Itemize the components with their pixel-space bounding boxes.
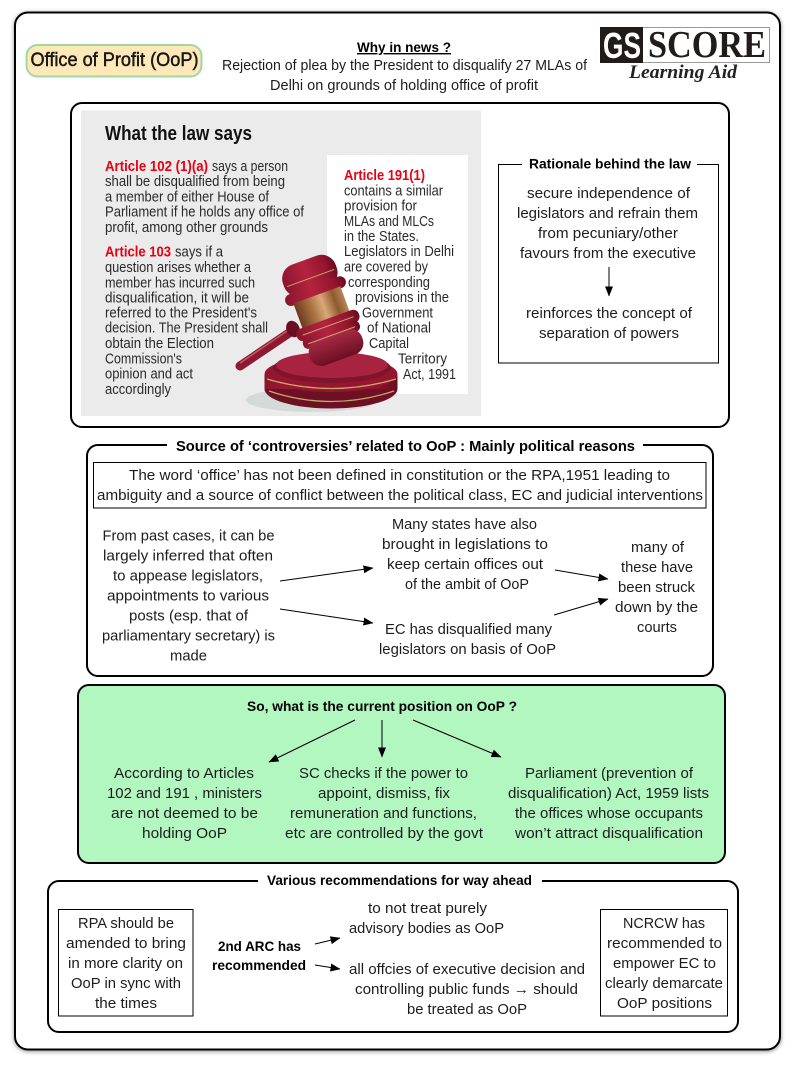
RPA box: the times <box>95 995 157 1012</box>
struck down text: down by the <box>615 599 698 616</box>
NCRCW box: clearly demarcate <box>605 975 723 992</box>
2nd ARC label: recommended <box>212 957 306 973</box>
struck down text: these have <box>621 559 693 576</box>
definition box: The word ‘office’ has not been defined in constitution or the RPA,1951 leading to <box>129 467 670 484</box>
past cases text: appointments to various <box>107 588 269 604</box>
NCRCW box: NCRCW has <box>623 915 705 932</box>
logo: GS Score Learning Aid <box>600 24 770 83</box>
panel: recommendations <box>48 873 738 1032</box>
parliament act text: won’t attract disqualification <box>514 825 703 842</box>
graphic heading: What the law says <box>105 122 252 145</box>
SC checks text <box>285 765 484 842</box>
SC checks text: etc are controlled by the govt <box>285 825 484 842</box>
current position heading: So, what is the current position on OoP ? <box>247 698 517 714</box>
past cases text: posts (esp. that of <box>129 608 249 624</box>
conclusion text: separation of powers <box>539 325 679 342</box>
past cases text: to appease legislators, <box>113 568 263 584</box>
advisory bodies text <box>349 900 504 937</box>
article 102 text: Parliament if he holds any office of <box>105 205 305 221</box>
article 191 text: Government <box>362 306 433 322</box>
recommendations heading: Various recommendations for way ahead <box>267 873 532 888</box>
NCRCW box: OoP positions <box>617 995 712 1012</box>
article 103 text: member has incurred such <box>105 275 255 291</box>
advisory bodies text: to not treat purely <box>368 900 488 917</box>
arrow <box>555 570 608 579</box>
articles text <box>107 765 262 842</box>
why in news heading: Why in news ? <box>357 39 451 55</box>
NCRCW box <box>600 910 728 1016</box>
rationale text: from pecuniary/other <box>538 225 678 242</box>
article 103 text: obtain the Election <box>105 336 214 352</box>
article 191 text: are covered by <box>344 260 429 276</box>
article 102 text: Article 102 (1)(a) <box>105 158 208 175</box>
article 103 text <box>105 244 268 398</box>
EC disqualified text <box>379 621 556 658</box>
EC disqualified text: EC has disqualified many <box>385 621 552 638</box>
RPA box: in more clarity on <box>68 955 183 972</box>
states legislation text <box>382 516 548 593</box>
arrow <box>315 938 340 944</box>
article 191 text: of National <box>367 321 431 337</box>
arrow <box>554 599 608 615</box>
article 191 text: provisions in the <box>355 290 449 306</box>
SC checks text: appoint, dismiss, fix <box>318 785 450 802</box>
article 191 text: contains a similar <box>344 183 443 199</box>
SC checks text: SC checks if the power to <box>299 765 468 782</box>
panel: source of controversies <box>87 438 713 676</box>
executive decision text: controlling public funds → should <box>355 981 578 998</box>
article 102 text <box>105 158 305 236</box>
past cases text: From past cases, it can be <box>102 528 274 544</box>
why in news text: Delhi on grounds of holding office of profit <box>270 77 539 94</box>
article 191 text: Capital <box>369 336 409 352</box>
NCRCW box: recommended to <box>607 935 722 952</box>
article 191 text: provision for <box>344 199 417 215</box>
rationale text: legislators and refrain them <box>517 205 698 222</box>
past cases text: made <box>170 648 207 664</box>
rationale text <box>517 185 698 262</box>
article 103 text: decision. The President shall <box>105 321 268 337</box>
parliament act text: Parliament (prevention of <box>525 765 694 782</box>
article 103 text: Article 103 <box>105 244 171 261</box>
struck down text: courts <box>637 619 677 636</box>
article 103 text: opinion and act <box>105 367 193 383</box>
states legislation text: keep certain offices out <box>387 556 544 573</box>
definition box: ambiguity and a source of conflict between the political class, EC and judicial interventions <box>97 487 703 504</box>
conclusion text <box>526 305 693 342</box>
article 191 text <box>344 167 456 383</box>
article 102 text: says a person <box>212 159 288 175</box>
articles text: According to Articles <box>114 765 254 782</box>
arrow <box>280 609 373 623</box>
arrow <box>269 720 355 762</box>
article 103 text: says if a <box>175 245 224 261</box>
advisory bodies text: advisory bodies as OoP <box>349 920 504 937</box>
controversies heading: Source of ‘controversies’ related to OoP : Mainly political reasons <box>176 438 635 455</box>
states legislation text: Many states have also <box>392 516 537 533</box>
article 103 text: Commission's <box>105 351 182 367</box>
arrow <box>381 720 383 757</box>
article 103 text: question arises whether a <box>105 260 252 276</box>
arrow <box>315 965 340 969</box>
rationale text: secure independence of <box>527 185 691 202</box>
parliament act text: disqualification) Act, 1959 lists <box>508 785 709 802</box>
past cases text <box>102 528 275 664</box>
conclusion text: reinforces the concept of <box>526 305 693 322</box>
SC checks text: remuneration and functions, <box>290 805 477 822</box>
EC disqualified text: legislators on basis of OoP <box>379 641 556 658</box>
executive decision text: be treated as OoP <box>407 1001 527 1018</box>
states legislation text: of the ambit of OoP <box>405 576 529 593</box>
arrow <box>608 267 610 296</box>
NCRCW box: empower EC to <box>613 955 716 972</box>
article 103 text: disqualification, it will be <box>105 290 249 306</box>
arrow <box>413 720 501 757</box>
logo: GS Score Learning Aid: Learning Aid <box>628 62 738 83</box>
articles text: 102 and 191 , ministers <box>107 785 262 802</box>
why in news <box>222 39 588 94</box>
RPA box: amended to bring <box>66 935 186 952</box>
article 191 text: MLAs and MLCs <box>344 214 434 230</box>
rationale box <box>498 156 718 363</box>
why in news text: Rejection of plea by the President to disqualify 27 MLAs of <box>222 57 588 74</box>
articles text: are not deemed to be <box>111 805 258 822</box>
articles text: holding OoP <box>142 825 227 842</box>
article 102 text: shall be disqualified from being <box>105 174 285 190</box>
executive decision text <box>349 961 585 1018</box>
rationale heading: Rationale behind the law <box>529 156 691 172</box>
icon: gavel <box>240 249 398 412</box>
logo: GS Score Learning Aid: SCORE <box>648 24 766 66</box>
article 103 text: accordingly <box>105 382 172 398</box>
logo: GS Score Learning Aid: GS <box>603 25 641 66</box>
title pill: Office of Profit (OoP) <box>30 50 198 71</box>
struck down text: many of <box>631 539 685 556</box>
article 191 text: Act, 1991 <box>403 367 456 383</box>
struck down text: been struck <box>618 579 695 596</box>
2nd ARC label <box>212 938 306 973</box>
title pill <box>26 45 202 76</box>
panel: what the law says and rationale <box>71 103 729 427</box>
parliament act text: the offices whose occupants <box>515 805 703 822</box>
parliament act text <box>508 765 709 842</box>
RPA box: OoP in sync with <box>71 975 181 992</box>
2nd ARC label: 2nd ARC has <box>218 938 301 954</box>
article 191 text: Article 191(1) <box>344 167 425 184</box>
RPA box <box>58 910 193 1016</box>
newspaper graphic: what the law says <box>81 110 481 416</box>
article 103 text: referred to the President's <box>105 305 257 321</box>
struck down text <box>615 539 698 636</box>
states legislation text: brought in legislations to <box>382 536 548 553</box>
article 191 text: Territory <box>398 352 448 368</box>
executive decision text: all offcies of executive decision and <box>349 961 585 978</box>
RPA box: RPA should be <box>78 915 174 932</box>
article 191 text: Legislators in Delhi <box>344 244 454 260</box>
past cases text: largely inferred that often <box>103 548 273 564</box>
why in news text <box>222 57 588 94</box>
past cases text: parliamentary secretary) is <box>102 628 275 644</box>
definition box <box>94 462 706 508</box>
article 191 text: in the States. <box>344 229 419 245</box>
article 102 text: profit, among other grounds <box>105 220 268 236</box>
article 102 text: a member of either House of <box>105 189 270 205</box>
panel: current position <box>78 685 725 863</box>
rationale text: favours from the executive <box>520 245 696 262</box>
arrow <box>280 568 373 581</box>
article 191 text: corresponding <box>348 275 430 291</box>
